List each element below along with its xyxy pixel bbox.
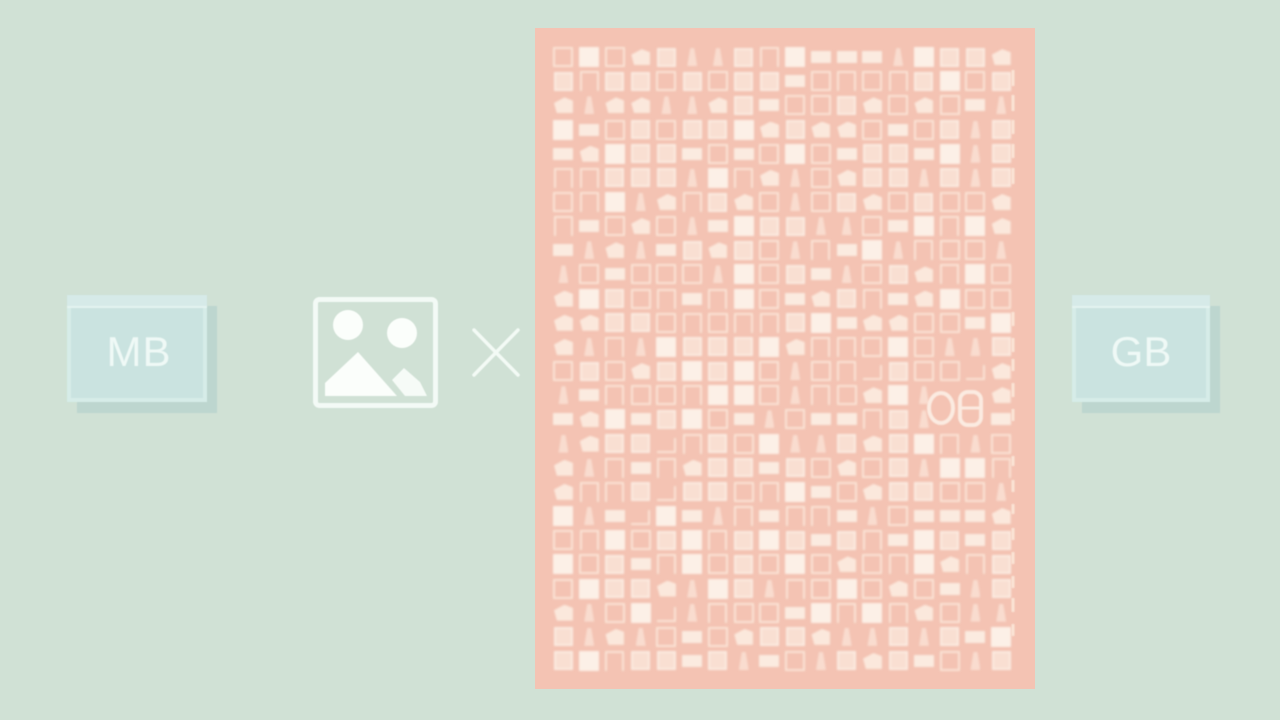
panel: grid of many images — [535, 28, 1035, 689]
oversized glyph shapes — [926, 390, 984, 428]
label: MB: MB — [106, 328, 172, 375]
card title bar — [67, 295, 207, 308]
icon: image picture — [312, 296, 438, 408]
label: GB: GB — [1111, 328, 1171, 375]
narrow partial column at right edge — [1011, 70, 1015, 636]
card: MB file — [67, 295, 207, 402]
icon: multiply sign — [472, 328, 520, 377]
card title bar — [1072, 295, 1210, 308]
card: GB file — [1072, 295, 1210, 402]
thumbnail grid — [552, 46, 1012, 672]
